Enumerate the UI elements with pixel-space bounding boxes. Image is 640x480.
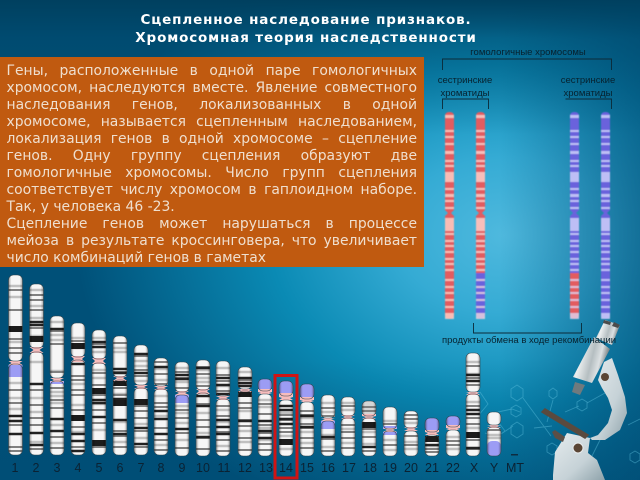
chromosome 12 [238, 367, 252, 456]
label: recombination products: продукты обмена в ходе рекомбинации [442, 335, 616, 346]
highlight: chromosome 14 [275, 376, 297, 478]
chromosome number labels: 6 [117, 461, 124, 475]
title: Хромосомная теория наследственности [135, 30, 477, 46]
chromosome number labels: 10 [196, 461, 210, 475]
chromosome number labels: 9 [179, 461, 186, 475]
chromosome 21 [425, 418, 439, 456]
microscope stage [542, 409, 588, 438]
chromosome 14 [279, 381, 293, 456]
chromosome 15 [300, 384, 314, 456]
chromosome 13 [258, 379, 272, 456]
diagram: homologous chromosomes recombination [438, 47, 615, 333]
bracket: homologous chromosomes [442, 59, 612, 70]
text panel: linked inheritance: мейоза в результате кроссинговера, что увеличивает [6, 233, 417, 249]
chromosome 10 [196, 360, 210, 456]
chromosome number labels: 17 [342, 461, 356, 475]
chromosome number labels [12, 461, 524, 475]
mitochondrial mark [511, 454, 518, 456]
label: left sister chromatids: хроматиды [441, 88, 490, 99]
chromosome 9 [175, 362, 189, 456]
chromosome number labels: 22 [446, 461, 460, 475]
title: Сцепленное наследование признаков. [141, 12, 471, 28]
icon: microscope [542, 320, 627, 480]
text panel: linked inheritance: генов. Одну группу сцепления образуют две [6, 148, 417, 164]
microscope base [553, 433, 605, 480]
chromosome 1 [8, 275, 22, 455]
title [135, 12, 477, 46]
bracket: left sister chromatids [442, 99, 488, 109]
chromatid 3: blue with red exchange [570, 112, 579, 319]
chromosome number labels: 3 [54, 461, 61, 475]
chromosome 4 [71, 323, 85, 455]
chromosome 22 [446, 416, 460, 456]
chromosome number labels: 4 [75, 461, 82, 475]
chromosome 17 [341, 397, 355, 456]
text panel: linked inheritance: гомологичные хромосомы. Число групп сцепления [6, 165, 417, 181]
text panel: linked inheritance: наследования генов, локализованных в одной [6, 96, 417, 112]
stage knob [552, 430, 565, 442]
bracket: recombination products [474, 323, 582, 333]
bracket: right sister chromatids [566, 99, 612, 109]
text panel: linked inheritance [0, 57, 424, 267]
chromosome 20 [404, 411, 418, 456]
chromosome 3 [50, 316, 64, 455]
chromosome number labels: 8 [158, 461, 165, 475]
chromosome number labels: 14 [279, 461, 293, 475]
chromosome X [466, 353, 480, 456]
chromosome number labels: 16 [321, 461, 335, 475]
label: homologous chromosomes: гомологичные хромосомы [470, 47, 586, 58]
chromosome 2 [30, 284, 44, 455]
chromosome number labels: 13 [259, 461, 273, 475]
focus hole [601, 373, 609, 381]
eyepiece caps [603, 320, 620, 328]
label: left sister chromatids: сестринские [438, 75, 492, 86]
text panel: linked inheritance: Так, у человека 46 -23. [6, 199, 175, 215]
microscope objective [572, 382, 585, 395]
chromatid 1: red [445, 112, 454, 319]
chromosome 8 [154, 358, 168, 455]
text panel: linked inheritance: соответствует числу хромосом в гаплоидном наборе. [6, 182, 417, 198]
chromatid 4: blue [601, 112, 610, 319]
chromosome 6 [113, 336, 127, 455]
text panel: linked inheritance: хромосом, наследуются вместе. Явление совместного [6, 80, 417, 96]
chromosome 7 [134, 345, 148, 455]
chromosome 19 [383, 407, 397, 456]
microscope eyepiece [596, 320, 620, 345]
chromosome number labels: 5 [96, 461, 103, 475]
chromosome number labels: 19 [383, 461, 397, 475]
chromosome number labels: 15 [300, 461, 314, 475]
chromosome number labels: Y [490, 461, 499, 475]
chromosome 18 [362, 401, 376, 456]
chromatid 2: red with blue exchange [476, 112, 485, 319]
text panel: linked inheritance: Сцепление генов может нарушаться в процессе [6, 216, 417, 232]
chromosome number labels: X [470, 461, 479, 475]
chromosome number labels: 18 [363, 461, 377, 475]
chromosome number labels: 2 [33, 461, 40, 475]
karyotype: chromosomes 1-22, X, Y [8, 275, 501, 456]
chromosome 5 [92, 330, 106, 455]
chromosome number labels: 11 [218, 461, 231, 475]
text panel: linked inheritance: число комбинаций генов в гаметах [6, 250, 266, 266]
chromosome number labels: 12 [238, 461, 252, 475]
chromosome number labels: MT [506, 461, 524, 475]
chromosome number labels: 20 [404, 461, 418, 475]
label: right sister chromatids: сестринские [561, 75, 615, 86]
label: right sister chromatids: хроматиды [564, 88, 613, 99]
decorative molecule lines [478, 390, 640, 456]
chromosome number labels: 1 [12, 461, 19, 475]
text panel: linked inheritance: Гены, расположенные в одной паре гомологичных [6, 62, 417, 78]
chromosome Y [487, 412, 501, 456]
microscope tube [573, 337, 610, 383]
base hole [573, 443, 583, 453]
text panel: linked inheritance: локализация генов в одной хромосоме – сцепление [6, 131, 417, 147]
chromosome number labels: 21 [425, 461, 439, 475]
chromosome 11 [216, 361, 230, 456]
microscope arm [590, 358, 627, 440]
chromosome 16 [321, 395, 335, 456]
text panel: linked inheritance: хромосоме, называется сцепленным наследованием, [6, 114, 417, 130]
chromosome number labels: 7 [138, 461, 145, 475]
